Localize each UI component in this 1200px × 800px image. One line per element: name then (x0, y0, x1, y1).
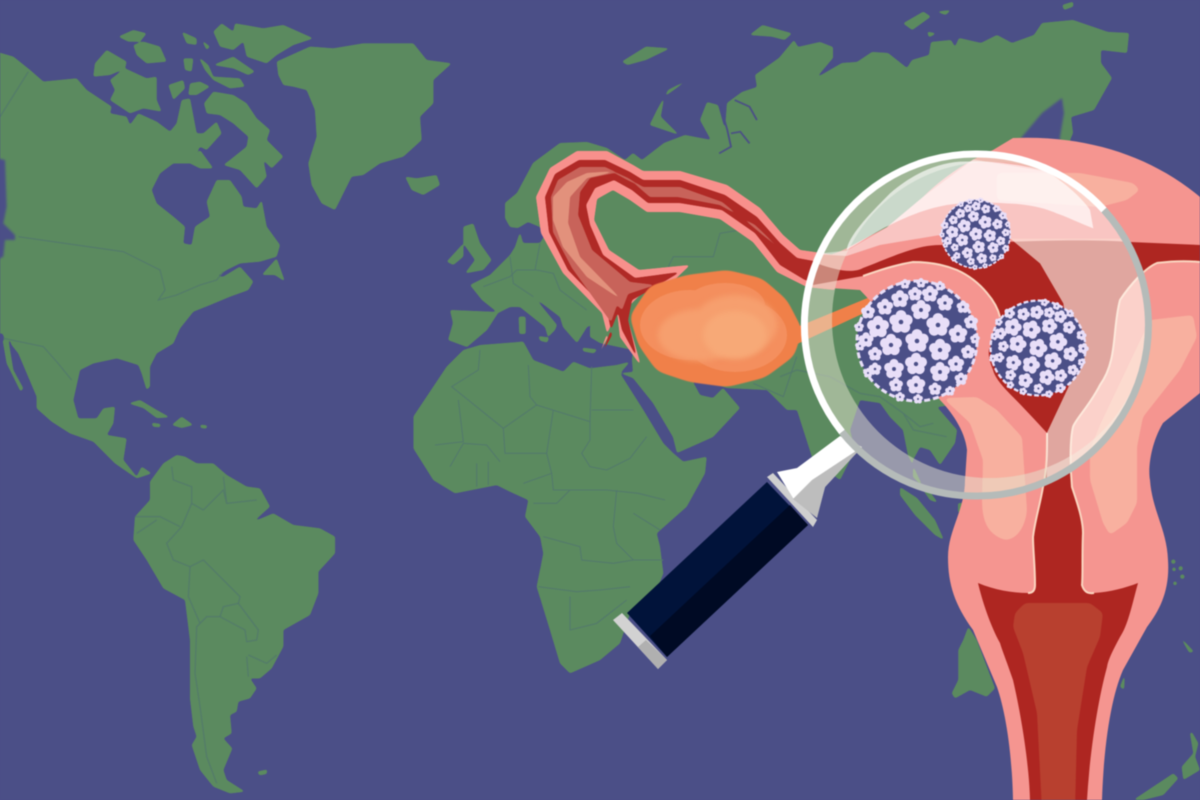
vaginal canal lining (1013, 603, 1103, 800)
lens rim (804, 154, 1148, 496)
tube inner tissue (551, 167, 790, 322)
South America and Caribbean (128, 400, 335, 793)
handle grip (627, 482, 808, 657)
glass edge crescent (807, 157, 1118, 493)
right pale wall tissue (1090, 315, 1197, 535)
left pale wall tissue (943, 397, 1027, 540)
Eurasia (448, 20, 1129, 487)
country borders (0, 72, 947, 783)
cream lining lines (863, 261, 1200, 593)
upper wash over the fundus (813, 159, 1133, 256)
grey rim arc (842, 210, 1148, 496)
virus particle large (854, 278, 980, 403)
top glare highlight (847, 161, 1093, 250)
virus particle right (974, 284, 1102, 411)
uterine wall (813, 138, 1200, 800)
Britain, Ireland and Mediterranean islands (447, 223, 597, 353)
Arctic islands of Eurasia (622, 2, 1073, 135)
virus particle top (932, 190, 1020, 278)
Africa (413, 342, 707, 673)
ovary (635, 275, 797, 382)
Sea of Okhotsk (1021, 98, 1064, 150)
fallopian tube (536, 151, 835, 368)
white rim arc (804, 154, 1104, 432)
tube red lining (545, 160, 835, 358)
lens glass overlays (801, 150, 1151, 500)
tube highlight (553, 171, 622, 300)
uterine cavity (813, 240, 1200, 800)
North America (0, 23, 452, 478)
ovary ligament (790, 297, 875, 345)
Australia and Oceania (952, 559, 1200, 800)
tube outer wall (536, 151, 835, 368)
handle end cap (613, 613, 667, 669)
Indonesia (900, 487, 944, 540)
right-side glare (1010, 238, 1147, 483)
handle collar (767, 473, 817, 527)
magnifying glass handle (613, 436, 862, 669)
uterus (813, 138, 1200, 800)
handle neck (777, 436, 862, 517)
fundus pale tissue (997, 173, 1140, 207)
Siberian inlets (719, 100, 757, 153)
